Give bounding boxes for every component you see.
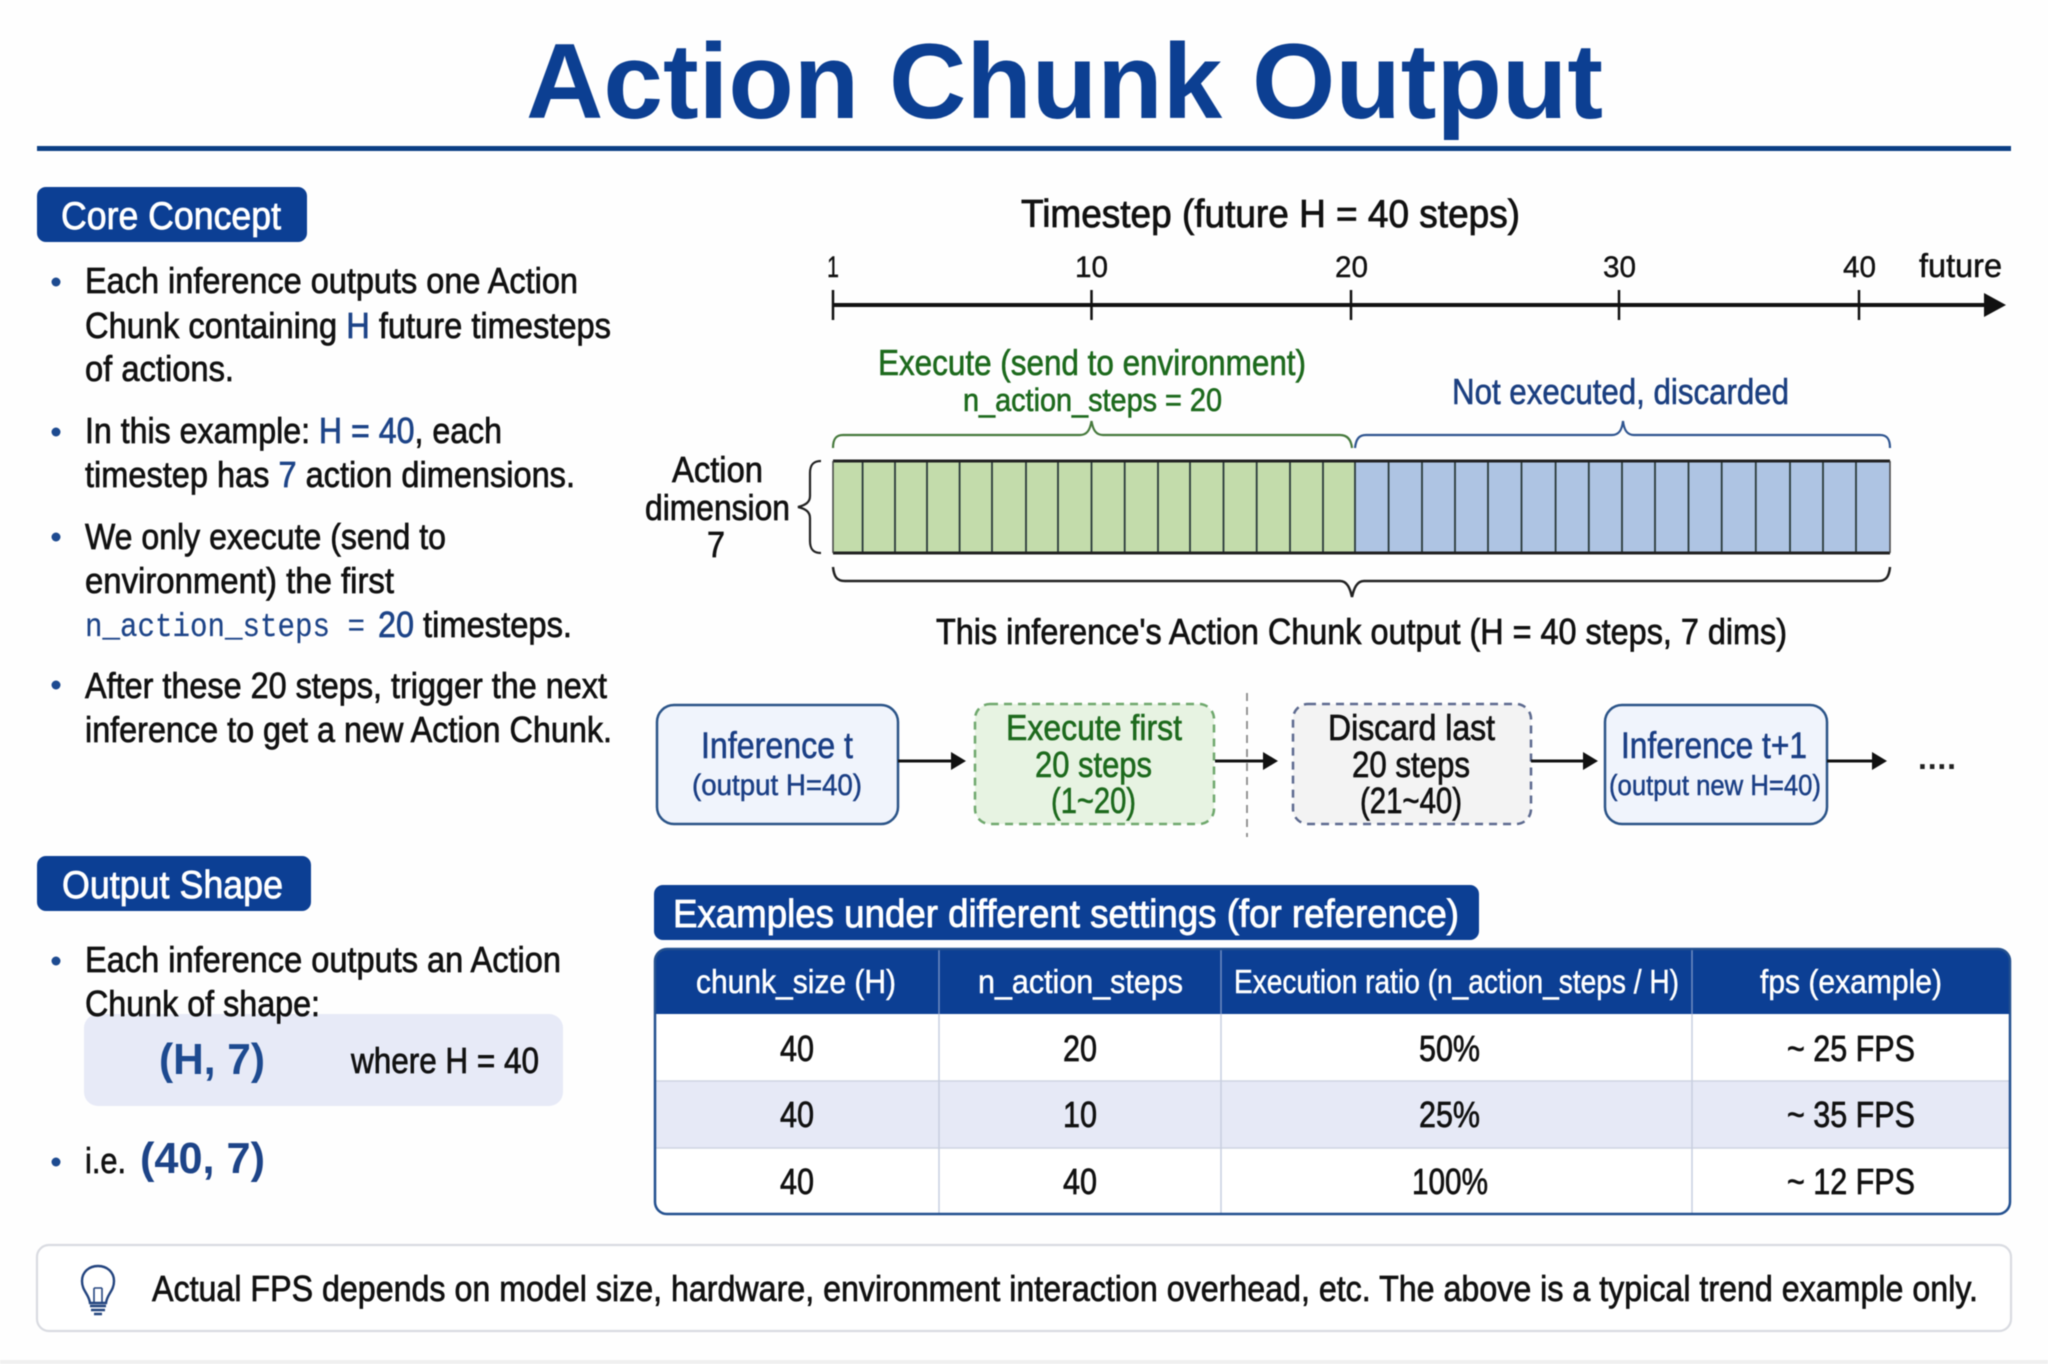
heading: output shape: Output Shape	[62, 864, 283, 907]
bullet: H = 40 example: timestep has 7 action dimensions.	[85, 454, 575, 495]
arrow	[1215, 752, 1278, 770]
tick labels: 1	[827, 251, 839, 284]
shape formula box	[84, 1014, 563, 1106]
bullet: next inference	[52, 665, 612, 750]
action dimension label: dimension	[645, 487, 790, 528]
execute label: n_action_steps = 20	[963, 382, 1222, 418]
brace: executed	[833, 421, 1352, 448]
shape formula box: (H, 7)	[159, 1035, 265, 1084]
box: execute first: 20 steps	[1035, 744, 1152, 785]
action dimension label: 7	[707, 524, 725, 565]
blue cells	[1355, 461, 1890, 553]
box: execute first: (1~20)	[1051, 780, 1136, 821]
box: inference t: Inference t	[701, 725, 854, 766]
row: 40 / 40: ~ 12 FPS	[1787, 1161, 1915, 1202]
arrow	[898, 752, 966, 770]
table header: chunk_size (H)	[696, 963, 896, 1000]
action dimension label: Action	[672, 449, 763, 490]
bullet: execute first steps	[52, 516, 572, 646]
box: inference t: (output H=40)	[692, 769, 862, 802]
action dimension label	[645, 449, 790, 565]
row: 40 / 20: 40	[780, 1028, 814, 1069]
arrow	[1827, 752, 1887, 770]
brace: whole chunk	[833, 567, 1890, 597]
bullet: one action chunk: Chunk containing H future timesteps	[85, 305, 611, 346]
tick labels: 20	[1335, 251, 1368, 284]
bullet: execute first steps: n_action_steps =	[85, 609, 365, 646]
box: discard last: 20 steps	[1352, 744, 1470, 785]
box: inference t+1: Inference t+1	[1621, 725, 1807, 766]
heading: examples: Examples under different settings (for reference)	[673, 893, 1459, 936]
bullet: shape description: Chunk of shape:	[85, 983, 320, 1024]
bullet: one action chunk	[52, 260, 611, 389]
not executed label: Not executed, discarded	[1452, 371, 1789, 412]
bullet: one action chunk: of actions.	[85, 348, 234, 389]
row: 40 / 40: 100%	[1412, 1161, 1488, 1202]
row: 40 / 10: 25%	[1419, 1094, 1480, 1135]
box: discard last: (21~40)	[1360, 780, 1462, 821]
callout: FPS note	[37, 1245, 2011, 1331]
bullet: H = 40 example: In this example: H = 40, each	[85, 410, 502, 451]
box: inference t	[657, 705, 898, 824]
flow diagram	[657, 693, 1956, 837]
shape formula box: where H = 40	[350, 1040, 539, 1081]
row: 40 / 40	[780, 1161, 1915, 1202]
brace: action dimension	[798, 461, 821, 553]
row: 40 / 10	[780, 1094, 1915, 1135]
heading: core concept	[37, 187, 307, 242]
bullet: one action chunk: Each inference outputs one Action	[85, 260, 578, 301]
heading: core concept: Core Concept	[61, 195, 281, 238]
bullet: concrete shape: (40, 7)	[140, 1134, 265, 1183]
tick labels: 10	[1075, 251, 1108, 284]
arrow	[1531, 752, 1598, 770]
box: discard last	[1293, 704, 1531, 824]
box: inference t+1: (output new H=40)	[1609, 770, 1821, 802]
row: 40 / 20: ~ 25 FPS	[1787, 1028, 1915, 1069]
chunk caption: This inference's Action Chunk output (H = 40 steps, 7 dims)	[936, 611, 1787, 652]
ellipsis: ....	[1918, 740, 1956, 776]
bullet: next inference: inference to get a new Action Chunk.	[85, 709, 612, 750]
table	[655, 949, 2010, 1214]
tick labels	[827, 247, 2002, 284]
icon: light bulb	[82, 1266, 114, 1314]
box: discard last: Discard last	[1328, 707, 1495, 748]
execute label	[878, 342, 1306, 418]
row: 40 / 10: 40	[780, 1094, 814, 1135]
box: execute first	[975, 704, 1214, 824]
tick labels: 30	[1603, 251, 1636, 284]
row: 40 / 10: ~ 35 FPS	[1787, 1094, 1915, 1135]
bullet: shape description	[52, 939, 561, 1024]
box: inference t+1	[1605, 705, 1827, 824]
panel: examples table	[654, 885, 2010, 1214]
row: 40 / 20: 50%	[1419, 1028, 1480, 1069]
bullet: H = 40 example	[52, 410, 575, 495]
panel: output shape	[37, 856, 563, 1183]
heading: output shape	[37, 856, 311, 911]
panel: core concept	[37, 187, 612, 750]
table header: n_action_steps	[978, 963, 1183, 1000]
tick labels: 40	[1843, 251, 1876, 284]
axis heading: Timestep (future H = 40 steps)	[1021, 193, 1520, 236]
box: execute first: Execute first	[1006, 707, 1182, 748]
bullet: concrete shape	[52, 1134, 265, 1183]
table header: fps (example)	[1760, 963, 1942, 1000]
chart: timestep axis	[827, 193, 2006, 320]
row: 40 / 10: 10	[1063, 1094, 1097, 1135]
table header	[696, 963, 1942, 1000]
bullet: execute first steps: 20	[378, 604, 414, 645]
bullet: next inference: After these 20 steps, trigger the next	[85, 665, 607, 706]
bullet: execute first steps: environment) the first	[85, 560, 394, 601]
row: 40 / 20	[780, 1028, 1915, 1069]
tick labels: future	[1919, 247, 2002, 284]
green cells	[833, 461, 1355, 553]
bullet: shape description: Each inference outputs an Action	[85, 939, 561, 980]
table header: Execution ratio (n_action_steps / H)	[1234, 963, 1679, 1000]
execute label: Execute (send to environment)	[878, 342, 1306, 383]
bullet: execute first steps: We only execute (send to	[85, 516, 446, 557]
row: 40 / 40: 40	[780, 1161, 814, 1202]
bullet: concrete shape: i.e.	[85, 1140, 126, 1181]
bullet: execute first steps: timesteps.	[423, 604, 572, 645]
row: 40 / 20: 20	[1063, 1028, 1097, 1069]
chart: action chunk grid	[645, 342, 1890, 652]
row: 40 / 40: 40	[1063, 1161, 1097, 1202]
brace: discarded	[1355, 421, 1890, 448]
title: Action Chunk Output	[526, 21, 1603, 141]
